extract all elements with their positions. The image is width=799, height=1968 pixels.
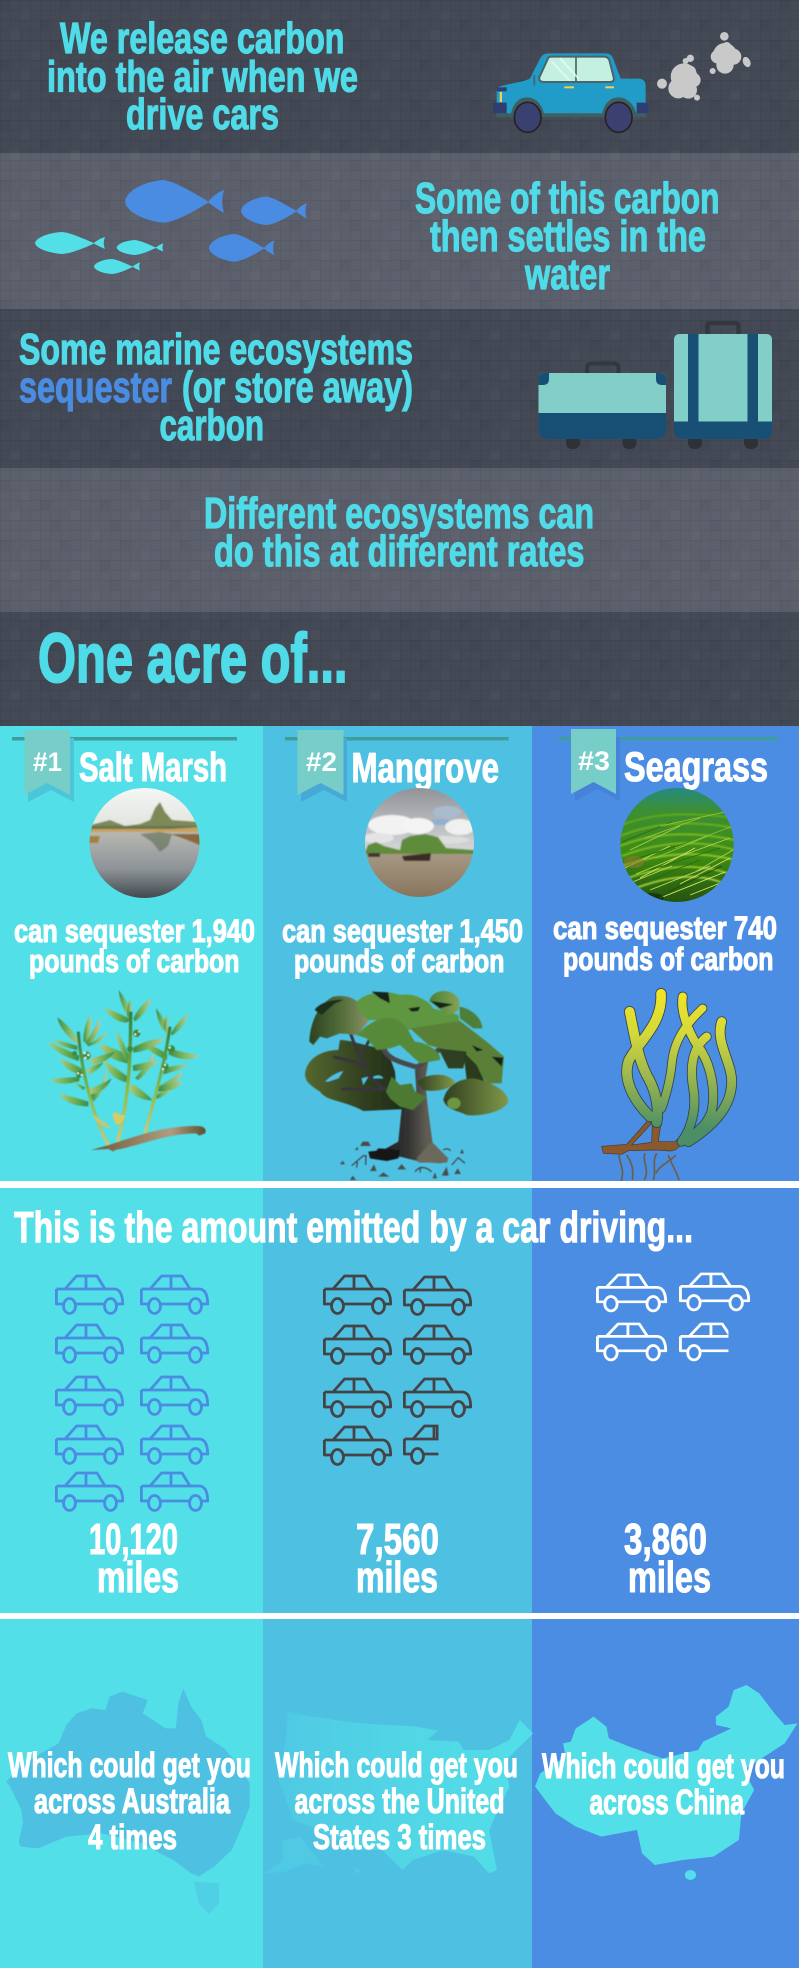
text: across United States: States 3 times xyxy=(313,1818,486,1857)
photo: seagrass xyxy=(619,787,735,903)
heading: salt marsh: Salt Marsh xyxy=(79,744,227,790)
panel: seagrass column xyxy=(532,726,799,1968)
text: release carbon: drive cars xyxy=(126,90,279,139)
number: salt marsh miles xyxy=(89,1515,179,1602)
text: across China xyxy=(542,1747,785,1822)
ribbon line: seagrass xyxy=(559,729,778,801)
number: mangrove miles xyxy=(356,1515,439,1602)
pictogram: salt marsh cars xyxy=(56,1276,208,1510)
text: release carbon: into the air when we xyxy=(47,52,358,102)
number: salt marsh miles: 10,120 xyxy=(89,1515,178,1564)
ribbon line: salt marsh: #1 xyxy=(33,747,62,777)
text: release carbon: We release carbon xyxy=(60,14,344,63)
divider: lower white bar xyxy=(0,1613,799,1619)
text: across Australia: 4 times xyxy=(88,1818,177,1857)
pictogram: mangrove cars xyxy=(324,1276,471,1464)
icon: school of fish xyxy=(35,180,307,274)
number: mangrove miles: 7,560 xyxy=(356,1515,439,1564)
text: sequester carbon: Some marine ecosystems xyxy=(19,325,413,374)
panel: band water xyxy=(0,153,799,309)
text: settles in water: water xyxy=(524,250,610,299)
text: seagrass amount xyxy=(553,910,777,977)
illustration: mangrove tree xyxy=(305,991,508,1180)
text: sequester carbon: (or store away) xyxy=(182,363,413,412)
illustration: seagrass plant xyxy=(602,994,732,1182)
text: sequester carbon: sequester xyxy=(19,363,172,412)
number: mangrove miles: miles xyxy=(356,1553,438,1602)
text: salt marsh amount xyxy=(14,913,255,979)
photo: salt marsh xyxy=(87,786,202,900)
illustration: salt marsh plant xyxy=(47,990,206,1152)
ribbon line: mangrove xyxy=(285,730,508,802)
text: across United States: Which could get you xyxy=(275,1746,518,1785)
map: United States xyxy=(265,1712,533,1873)
panel: band sequester xyxy=(0,309,799,468)
text: salt marsh amount: pounds of carbon xyxy=(29,943,240,979)
icon: suitcases xyxy=(538,323,772,449)
number: seagrass miles xyxy=(624,1515,711,1602)
panel: band rates xyxy=(0,468,799,612)
text: settles in water xyxy=(415,174,720,299)
text: across United States: across the United xyxy=(294,1782,504,1821)
text: different rates xyxy=(204,489,594,576)
map: Australia xyxy=(6,1688,250,1914)
text: mangrove amount xyxy=(282,913,523,979)
pictogram: seagrass cars xyxy=(597,1274,749,1360)
ribbon line: seagrass: #3 xyxy=(578,746,610,776)
text: across Australia: Which could get you xyxy=(8,1746,251,1785)
text: across Australia xyxy=(8,1746,251,1857)
number: seagrass miles: miles xyxy=(628,1553,711,1602)
text: mangrove amount: can sequester 1,450 xyxy=(282,913,523,949)
text: across United States xyxy=(275,1746,518,1857)
text: sequester carbon xyxy=(19,325,413,450)
text: salt marsh amount: can sequester 1,940 xyxy=(14,913,255,949)
map: China xyxy=(535,1685,797,1880)
heading: one acre of: One acre of... xyxy=(38,619,348,697)
number: salt marsh miles: miles xyxy=(97,1553,179,1602)
text: across Australia: across Australia xyxy=(34,1782,230,1821)
text: different rates: Different ecosystems can xyxy=(204,489,594,538)
text: mangrove amount: pounds of carbon xyxy=(294,943,504,979)
text: sequester carbon: carbon xyxy=(160,401,264,450)
panel: salt marsh column xyxy=(0,726,263,1968)
panel: mangrove column xyxy=(263,726,532,1968)
photo: mangrove xyxy=(365,788,474,897)
panel: band cars xyxy=(0,0,799,153)
heading: mangrove: Mangrove xyxy=(352,744,499,791)
ribbon line: mangrove: #2 xyxy=(306,747,337,777)
text: different rates: do this at different rates xyxy=(214,527,584,576)
icon: blue car with exhaust xyxy=(493,32,752,132)
text: settles in water: then settles in the xyxy=(430,212,706,261)
panel: band one acre xyxy=(0,612,799,726)
ribbon line: salt marsh xyxy=(12,730,237,802)
number: seagrass miles: 3,860 xyxy=(624,1515,707,1564)
text: release carbon xyxy=(47,14,358,139)
divider: upper white bar xyxy=(0,1181,799,1188)
